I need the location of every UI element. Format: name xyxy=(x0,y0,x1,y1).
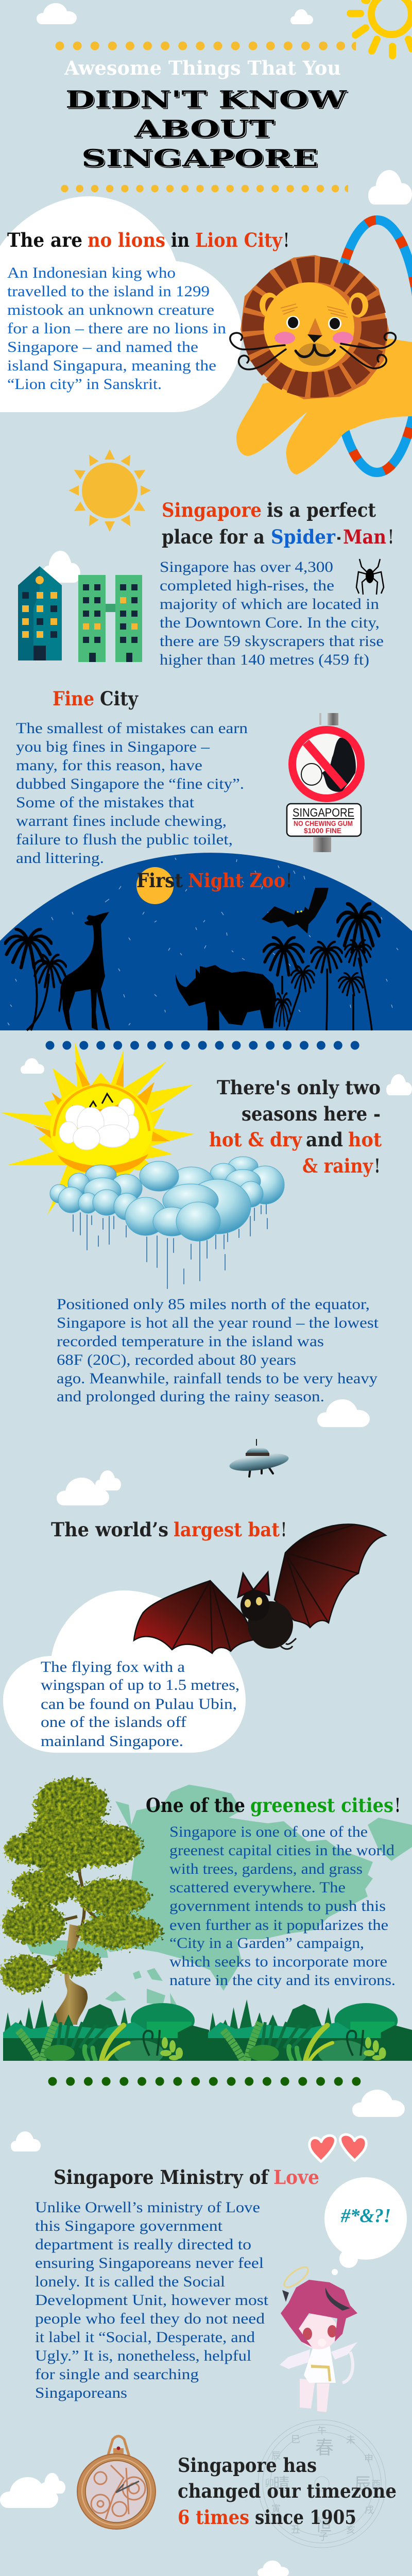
text block: greenest cities: scattered everywhere. The xyxy=(169,1879,346,1896)
heading: no lions in Lion City: The are xyxy=(7,229,82,251)
illustration: cupid character xyxy=(280,2264,357,2412)
faded chinese sundial: 戌 xyxy=(365,2505,374,2515)
heading: perfect place for a Spider-Man: Man xyxy=(343,526,386,548)
text block: ministry of love: for single and searching xyxy=(35,2366,199,2383)
bat silhouette xyxy=(262,888,329,934)
text block: lion city: island Singapura, meaning the xyxy=(7,357,216,374)
text block: fine city: and littering. xyxy=(16,850,104,867)
text block: flying fox: mainland Singapore. xyxy=(41,1733,183,1750)
heading: timezone: since 1905 xyxy=(255,2506,356,2529)
text block: ministry of love: department is really directed to xyxy=(35,2236,251,2253)
heading: no lions in Lion City xyxy=(7,229,289,251)
heading: world's largest bat: ! xyxy=(281,1518,286,1541)
cloud right of title xyxy=(368,170,412,205)
text block: equator climate: ago. Meanwhile, rainfall tends to be very heavy xyxy=(57,1370,377,1387)
text block: high-rises: majority of which are located in xyxy=(160,596,379,613)
faded chinese sundial: 寅 xyxy=(271,2504,281,2514)
text block: high-rises: completed high-rises, the xyxy=(160,577,334,594)
text block: flying fox xyxy=(41,1658,239,1750)
illustration: pocket watch xyxy=(77,2436,156,2529)
text block: high-rises: Singapore has over 4,300 xyxy=(160,558,333,575)
title: ABOUT xyxy=(134,115,274,143)
text block: equator climate: recorded temperature in the island was xyxy=(57,1333,324,1350)
cloud under climate text xyxy=(317,1399,370,1427)
icon: spider xyxy=(356,559,384,595)
illustration: no chewing gum sign: SINGAPORE xyxy=(293,806,354,819)
lion body xyxy=(236,337,412,474)
illustration: rain clouds xyxy=(50,1157,284,1289)
faded chinese sundial: 亥 xyxy=(346,2525,355,2535)
heading: two seasons: ! xyxy=(374,1155,380,1177)
title: Awesome Things That You xyxy=(64,57,341,79)
right cloud xyxy=(210,1157,284,1207)
left cloud xyxy=(50,1165,142,1215)
heading: greenest cities xyxy=(146,1794,400,1817)
text block: fine city: warrant fines include chewing, xyxy=(16,812,227,829)
heading: first night zoo: First xyxy=(136,869,183,892)
text block: flying fox: one of the islands off xyxy=(41,1714,186,1731)
heading: two seasons: and xyxy=(306,1128,343,1151)
illustration: no chewing gum sign: NO CHEWING GUM xyxy=(294,819,353,827)
text block: fine city: you big fines in Singapore – xyxy=(16,738,210,755)
text block: fine city: many, for this reason, have xyxy=(16,757,202,774)
text block: high-rises: higher than 140 metres (459 ft) xyxy=(160,651,369,668)
lion face xyxy=(264,282,354,372)
dotted divider top xyxy=(60,42,356,50)
heading: no lions in Lion City: no lions xyxy=(88,229,165,251)
cloud double left of watch xyxy=(0,2473,65,2508)
text block: fine city xyxy=(16,720,248,867)
heading: two seasons: There's only two xyxy=(217,1076,381,1099)
heading: fine city: Fine xyxy=(53,687,94,710)
night sky dome xyxy=(0,853,412,1030)
speech bubble with symbols: #*&?! xyxy=(340,2205,391,2227)
lion eyes, cheeks and nose xyxy=(274,304,353,366)
text block: equator climate: Singapore is hot all the year round – the lowest xyxy=(57,1314,379,1331)
text block: ministry of love: Unlike Orwell’s ministry of Love xyxy=(35,2199,260,2216)
heading: perfect place for a Spider-Man: Spider xyxy=(271,526,335,548)
grass and foliage band xyxy=(3,1999,412,2066)
text block: lion city: “Lion city” in Sanskrit. xyxy=(7,376,162,393)
icon: two hearts xyxy=(307,2131,369,2163)
faded chinese sundial: 未 xyxy=(346,2435,355,2445)
illustration: red bat xyxy=(134,1524,386,1653)
heading: timezone xyxy=(178,2454,397,2529)
hoop xyxy=(334,220,412,472)
cloud above flower section xyxy=(258,2561,289,2576)
heading: two seasons: hot & dry xyxy=(209,1128,302,1151)
icon: yellow sun xyxy=(68,449,151,532)
lion whiskers xyxy=(230,333,396,369)
cloud top middle xyxy=(290,9,313,24)
illustration: smiling sun xyxy=(0,1041,195,1215)
title: SINGAPORE xyxy=(81,144,318,172)
illustration: lion with hoop xyxy=(230,220,412,474)
heading: timezone: Singapore has xyxy=(178,2454,317,2477)
heading: no lions in Lion City: Lion City xyxy=(195,229,283,251)
text block: greenest cities: Singapore is one of one of the xyxy=(169,1823,368,1840)
text block: ministry of love: Ugly.” It is, nonetheless, helpful xyxy=(35,2347,251,2364)
cloud top left xyxy=(37,3,77,24)
lion mane xyxy=(241,255,389,399)
heading: two seasons: & rainy xyxy=(302,1155,373,1177)
illustration: no chewing gum sign xyxy=(287,713,365,852)
faded chinese sundial: 子 xyxy=(319,2532,328,2542)
faded chinese sundial: 辰 xyxy=(271,2451,281,2461)
text block: equator climate: Positioned only 85 miles north of the equator, xyxy=(57,1296,370,1313)
faded chinese sundial: 申 xyxy=(364,2453,373,2464)
text block: ministry of love: people who feel they do not need xyxy=(35,2310,265,2327)
heading: first night zoo: Night Zoo xyxy=(188,869,285,892)
text block: greenest cities xyxy=(169,1823,396,1989)
lion ears xyxy=(260,293,368,317)
icon: flying saucer xyxy=(228,1439,290,1477)
text block: ministry of love: it label it “Social, Desperate, and xyxy=(35,2329,255,2346)
heading: first night zoo xyxy=(136,869,291,892)
illustration: no chewing gum sign: $1000 FINE xyxy=(304,826,341,835)
text block: greenest cities: “City in a Garden” campaign, xyxy=(169,1935,364,1952)
cloud left of smiling sun xyxy=(21,1058,44,1074)
faded chinese sundial: 春 xyxy=(315,2437,334,2458)
heading: two seasons: hot xyxy=(348,1128,382,1151)
text block: ministry of love xyxy=(35,2199,269,2401)
heading: ministry of love: Singapore Ministry of xyxy=(54,2166,269,2189)
heading: perfect place for a Spider-Man: Singapore xyxy=(162,499,262,521)
text block: greenest cities: with trees, gardens, and grass xyxy=(169,1860,363,1877)
giraffe silhouette xyxy=(58,912,110,1030)
text block: lion city: mistook an unknown creature xyxy=(7,301,214,318)
faded chinese sundial: 丑 xyxy=(291,2524,300,2535)
heading: greenest cities: ! xyxy=(395,1794,400,1817)
text block: greenest cities: even further as it popularizes the xyxy=(169,1917,388,1934)
heading: world's largest bat: The world’s xyxy=(51,1518,168,1541)
heading: perfect place for a Spider-Man: - xyxy=(337,526,341,548)
text block: equator climate: 68F (20C), recorded about 80 years xyxy=(57,1351,296,1368)
speech cloud behind lion text xyxy=(0,196,242,412)
heading: first night zoo: ! xyxy=(286,869,291,892)
text block: lion city: Singapore – and named the xyxy=(7,338,198,355)
sky specks xyxy=(8,858,398,1025)
heading: fine city xyxy=(53,687,139,710)
map of Singapore xyxy=(26,1785,412,2009)
text block: ministry of love: this Singapore government xyxy=(35,2217,223,2234)
heading: no lions in Lion City: ! xyxy=(284,229,289,251)
heading: perfect place for a Spider-Man xyxy=(162,499,393,548)
cloud upper right of ministry xyxy=(352,2090,405,2117)
faded chinese sundial: 巳 xyxy=(291,2434,300,2445)
heading: world's largest bat xyxy=(51,1518,286,1541)
dotted divider blue xyxy=(50,1041,356,1050)
moon xyxy=(136,867,174,904)
text block: lion city xyxy=(7,264,226,393)
text block: ministry of love: Singaporeans xyxy=(35,2384,127,2401)
text block: flying fox: wingspan of up to 1.5 metres, xyxy=(41,1676,239,1693)
text block: greenest cities: which seeks to incorporate more xyxy=(169,1953,387,1970)
heading: no lions in Lion City: in xyxy=(171,229,190,251)
heading: two seasons xyxy=(209,1076,382,1177)
text block: equator climate xyxy=(57,1296,379,1405)
text block: greenest cities: greenest capital cities in the world xyxy=(169,1842,394,1859)
illustration: bonsai tree xyxy=(1,1778,162,2025)
title xyxy=(64,57,348,172)
speech cloud behind bat text xyxy=(3,1590,246,1753)
heading: perfect place for a Spider-Man: is a perfect xyxy=(267,499,376,521)
panel: lion city xyxy=(0,196,289,412)
faded chinese sundial: 恒 xyxy=(315,2516,332,2534)
text block: fine city: failure to flush the public toilet, xyxy=(16,831,233,848)
text block: high-rises: there are 59 skyscrapers that rise xyxy=(160,633,384,650)
heading: ministry of love: Love xyxy=(273,2166,319,2189)
faded chinese sundial: 酉 xyxy=(371,2479,381,2489)
text block: lion city: An Indonesian king who xyxy=(7,264,176,281)
dotted divider green xyxy=(53,2077,358,2086)
palm trees left xyxy=(5,929,66,1030)
illustration: teal building xyxy=(18,566,62,660)
text block: fine city: The smallest of mistakes can earn xyxy=(16,720,248,737)
cloud double above bat heading xyxy=(57,1470,121,1505)
text block: fine city: Some of the mistakes that xyxy=(16,794,195,811)
speech bubble with symbols xyxy=(324,2177,407,2275)
text block: fine city: dubbed Singapore the “fine city”. xyxy=(16,775,244,792)
panel: first night zoo dome xyxy=(0,853,412,1030)
heading: timezone: 6 times xyxy=(178,2506,249,2529)
text block: ministry of love: lonely. It is called the Social xyxy=(35,2273,225,2290)
dotted divider under title xyxy=(65,185,348,192)
rhino silhouette xyxy=(176,965,276,1030)
palm trees right xyxy=(264,904,380,1030)
text block: high-rises xyxy=(160,558,384,668)
text block: ministry of love: ensuring Singaporeans never feel xyxy=(35,2255,264,2272)
text block: equator climate: and prolonged during the rainy season. xyxy=(57,1388,324,1405)
faded chinese sundial xyxy=(258,2420,386,2548)
heading: two seasons: seasons here - xyxy=(242,1103,381,1125)
illustration: green twin towers xyxy=(78,575,142,662)
heading: timezone: changed our timezone xyxy=(178,2480,397,2502)
text block: lion city: for a lion – there are no lions in xyxy=(7,320,226,337)
text block: greenest cities: nature in the city and its environs. xyxy=(169,1972,396,1989)
heading: greenest cities: One of the xyxy=(146,1794,245,1817)
title: DIDN'T KNOW xyxy=(65,86,348,113)
faded chinese sundial: 辰 xyxy=(354,2475,371,2493)
heading: world's largest bat: largest bat xyxy=(174,1518,280,1541)
rain drops xyxy=(73,1204,267,1289)
text block: high-rises: the Downtown Core. In the city, xyxy=(160,614,380,631)
heading: perfect place for a Spider-Man: place for a xyxy=(162,526,265,548)
heading: fine city: City xyxy=(100,687,139,710)
cloud left of ministry xyxy=(11,2131,41,2151)
cloud behind buildings xyxy=(42,551,80,583)
faded chinese sundial: 卯 xyxy=(265,2478,274,2488)
text block: greenest cities: government intends to push this xyxy=(169,1897,386,1914)
heading: greenest cities: greenest cities xyxy=(250,1794,393,1817)
cloud right of seasons heading xyxy=(386,1074,412,1095)
text block: lion city: travelled to the island in 1299 xyxy=(7,283,210,300)
text block: flying fox: can be found on Pulau Ubin, xyxy=(41,1696,237,1713)
faded chinese sundial: 午 xyxy=(317,2426,327,2436)
text block: flying fox: The flying fox with a xyxy=(41,1658,185,1675)
centre cloud xyxy=(114,1161,251,1241)
text block: ministry of love: Development Unit, however most xyxy=(35,2292,269,2309)
icon: sun top right xyxy=(350,0,412,56)
heading: perfect place for a Spider-Man: ! xyxy=(388,526,393,548)
faded chinese sundial: 晴 xyxy=(273,2475,289,2493)
